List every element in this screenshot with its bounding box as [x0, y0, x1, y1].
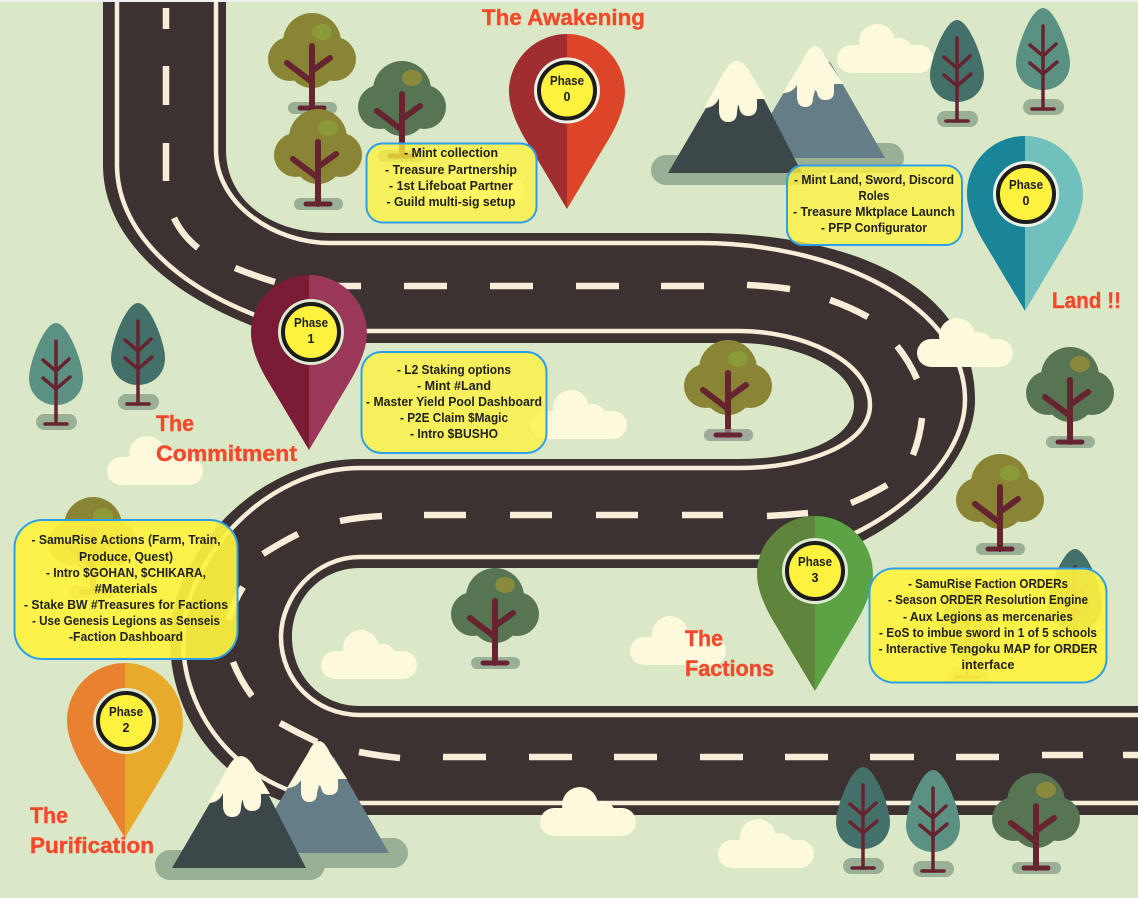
pin: phase 3 green: 3 [812, 571, 819, 585]
callout: phase 0 mint: - Guild multi-sig setup [386, 195, 516, 209]
tree: dark teal top [930, 20, 984, 127]
callout: phase 0 mint: - Treasure Partnership [385, 163, 517, 177]
callout: phase 0 mint [366, 144, 536, 222]
callout: phase 1: - P2E Claim $Magic [400, 411, 508, 425]
tree: green right [1026, 347, 1114, 448]
pin: phase 0 red [509, 34, 625, 209]
pin: phase 0 red: Phase [550, 74, 584, 88]
mountains: bottom left [155, 741, 408, 880]
heading: The Purification: The [30, 803, 68, 828]
pin: phase 2 orange [67, 663, 183, 838]
heading: The Purification [30, 803, 154, 858]
callout: phase 3 [870, 568, 1106, 682]
callout: phase 3: - Aux Legions as mercenaries [903, 610, 1073, 624]
heading: The Awakening: The Awakening [482, 5, 645, 30]
tree: light teal behind callout [940, 576, 994, 683]
callout: phase 1: - L2 Staking options [397, 363, 511, 377]
callout: land: - Treasure Mktplace Launch [793, 205, 955, 219]
pin: phase 3 green: Phase [798, 555, 832, 569]
callout: phase 2: Produce, Quest) [79, 550, 173, 564]
heading: Land: Land !! [1052, 288, 1121, 313]
pin: phase 2 orange: Phase [109, 705, 143, 719]
callout: land: Roles [858, 189, 890, 203]
callout: phase 2: - SamuRise Actions (Farm, Train, [32, 533, 220, 547]
tree: light teal top [1016, 8, 1070, 115]
callout: phase 1 [362, 352, 546, 453]
pin: phase 0 teal: 0 [1023, 194, 1030, 208]
callout: phase 2: - Intro $GOHAN, $CHIKARA, [46, 566, 206, 580]
callout: phase 1: - Master Yield Pool Dashboard [366, 395, 542, 409]
heading: The Factions [685, 626, 774, 681]
callout: land: - Mint Land, Sword, Discord [794, 173, 954, 187]
tree: dark teal left [111, 303, 165, 410]
callout: phase 3: interface [962, 658, 1015, 672]
pin: phase 0 teal: Phase [1009, 178, 1043, 192]
tree: dark teal behind callout [1048, 549, 1102, 656]
heading: The Commitment [156, 411, 298, 466]
tree: green center [358, 61, 446, 162]
callout: phase 3: - Interactive Tengoku MAP for ORDER [878, 642, 1098, 656]
tree: olive lower [274, 109, 362, 210]
tree: olive behind callout [49, 497, 137, 598]
callout: phase 2: -Faction Dashboard [69, 630, 183, 644]
callout: phase 1: - Intro $BUSHO [410, 427, 498, 441]
callout: phase 0 mint: - Mint collection [404, 146, 498, 160]
callout: phase 3: - SamuRise Faction ORDERs [908, 577, 1068, 591]
tree: green lower loop [451, 568, 539, 669]
tree: olive top [268, 13, 356, 114]
callout: land: - PFP Configurator [821, 221, 927, 235]
callout: phase 1: - Mint #Land [417, 379, 491, 393]
callout: land [787, 166, 962, 245]
tree: light teal bottom [906, 770, 960, 877]
pin: phase 0 red: 0 [564, 90, 571, 104]
callout: phase 2: #Materials [94, 582, 158, 596]
callout: phase 2 [14, 520, 238, 659]
heading: The Factions: Factions [685, 656, 774, 681]
heading: The Commitment: The [156, 411, 194, 436]
heading: The Factions: The [685, 626, 723, 651]
mountains: top right [651, 46, 904, 185]
pin: phase 1 crimson: Phase [294, 316, 328, 330]
tree: olive inside loop [684, 340, 772, 441]
pin: phase 2 orange: 2 [123, 721, 130, 735]
clouds [107, 24, 1013, 868]
callout: phase 2: - Stake BW #Treasures for Factions [24, 598, 228, 612]
callout: phase 2: - Use Genesis Legions as Senseis [32, 614, 220, 628]
heading: The Commitment: Commitment [156, 441, 298, 466]
pin: phase 1 crimson: 1 [308, 332, 315, 346]
callout: phase 3: - Season ORDER Resolution Engine [888, 593, 1088, 607]
heading: The Purification: Purification [30, 833, 154, 858]
callout: phase 3: - EoS to imbue sword in 1 of 5 schools [879, 626, 1097, 640]
tree: dark teal bottom [836, 767, 890, 874]
tree: olive right [956, 454, 1044, 555]
tree: light teal left [29, 323, 83, 430]
pin: phase 1 crimson [251, 275, 367, 450]
pin: phase 0 teal [967, 136, 1083, 311]
tree: green bottom [992, 773, 1080, 874]
pin: phase 3 green [757, 516, 873, 691]
callout: phase 0 mint: - 1st Lifeboat Partner [389, 179, 513, 193]
